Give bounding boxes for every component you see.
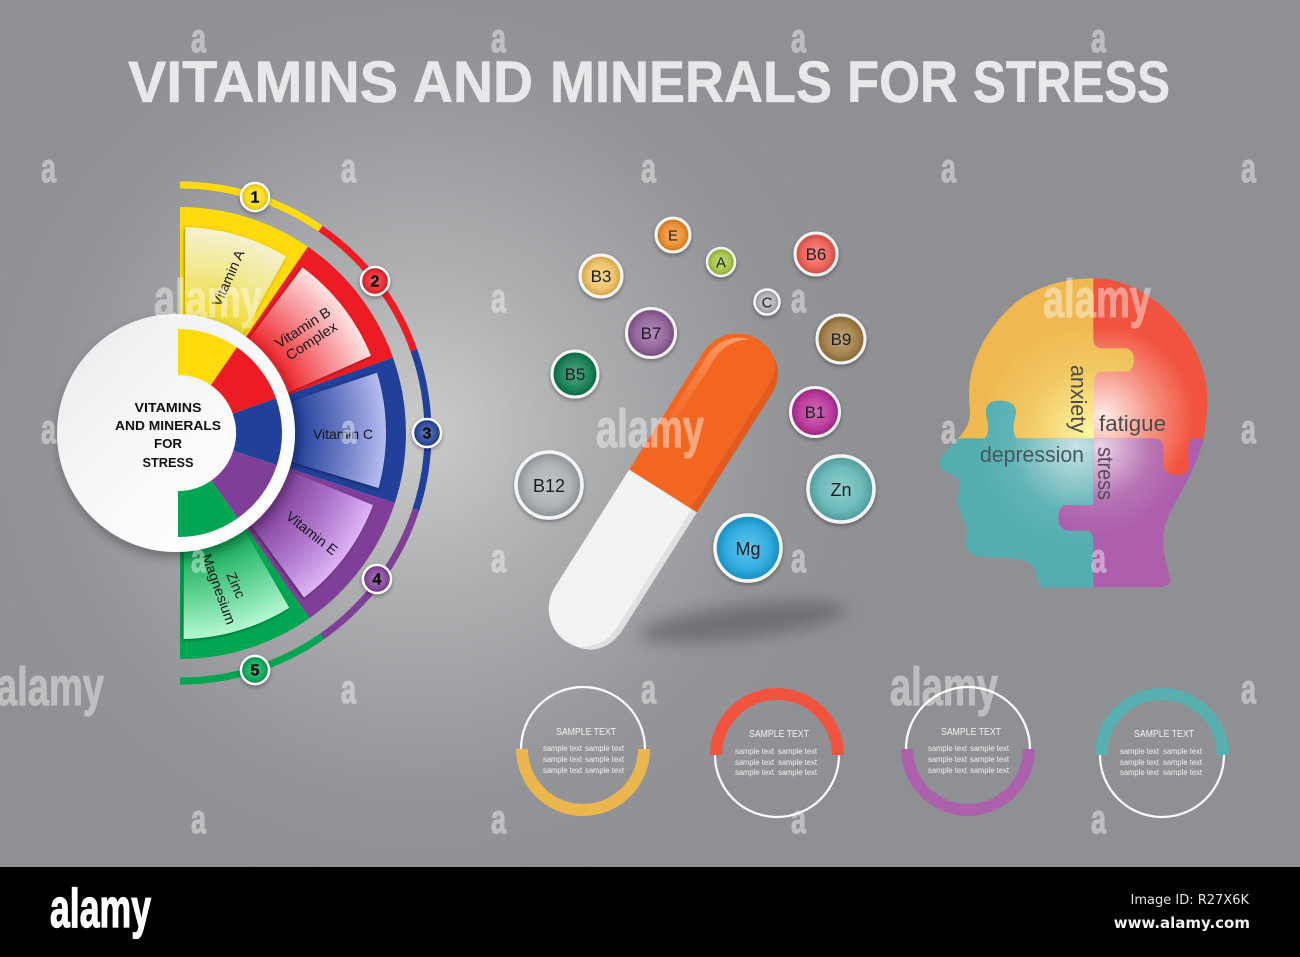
hub segments [178,329,282,537]
panel: zinc magnesium [184,425,289,639]
sample circle: purple: sample text [928,744,968,753]
stock watermark overlay: a [791,15,807,61]
sample circle: yellow: sample text [543,744,583,753]
stock watermark overlay: a [641,145,657,191]
stock watermark overlay: a [41,145,57,191]
sample circle: teal: sample text [1163,768,1203,777]
panel: vitamin E [178,425,373,598]
stock watermark overlay: a [491,796,507,842]
vitamin bubble B6: B6 [806,245,826,264]
center text: AND MINERALS [115,418,221,433]
sample circle: yellow: sample text [585,766,625,775]
sample circle: red: sample text [778,768,818,777]
sample circle: purple [901,687,1035,816]
word: anxiety: anxiety [1066,365,1091,433]
word: depression: depression [980,442,1084,467]
sample circle: teal: sample text [1120,758,1160,767]
stock watermark overlay: a [341,406,357,452]
panel: vitamin C [195,373,386,488]
sample circle: purple: sample text [970,755,1010,764]
center disc [57,314,295,552]
vitamin bubble E [656,218,690,252]
outer progress ring [180,185,428,681]
word: stress: stress [1093,447,1118,500]
stock watermark overlay: a [1091,796,1107,842]
sample circle: yellow: sample text [585,744,625,753]
stock watermark overlay: a [941,406,957,452]
pill shadow [637,592,847,652]
mineral bubble Mg: Mg [735,539,761,559]
stock watermark overlay: a [491,275,507,321]
vitamin bubble B7: B7 [641,324,661,343]
stock watermark overlay: a [1241,666,1257,712]
stock watermark overlay: a [41,406,57,452]
sample circle: red: sample text [735,747,775,756]
stock watermark overlay: a [791,535,807,581]
title: STRESS [973,50,1170,115]
stock watermark overlay: a [791,275,807,321]
sample circle: teal: sample text [1120,768,1160,777]
stock watermark overlay: alamy [596,399,704,459]
title: AND [413,50,533,115]
stock watermark overlay: a [191,796,207,842]
wedge: yellow [180,207,308,433]
footer image id: Image ID: R27X6K [1131,893,1249,908]
label: Zinc Magnesium: Magnesium [199,551,239,627]
center text: FOR [154,436,183,451]
stock watermark overlay: a [1091,15,1107,61]
vitamin bubble B3 [580,255,622,297]
vitamin bubble C: C [762,294,773,312]
mineral bubble B12 [516,452,582,518]
head pieces [939,278,1208,588]
title [128,50,1170,115]
footer band [0,867,1300,957]
number badge 4 [363,565,391,593]
center text: VITAMINS [134,400,202,415]
number badge 3: 3 [423,426,432,442]
vitamin bubble C [754,290,780,314]
wedge: red [180,247,393,433]
vitamin bubble B9 [817,315,865,363]
sample circle: purple: sample text [928,766,968,775]
number badge 4: 4 [373,572,382,588]
vitamin bubble B5: B5 [565,365,585,384]
center text: STRESS [142,455,194,470]
footer url: www.alamy.com [1114,914,1250,932]
vitamin bubble B6 [795,233,837,275]
center text [115,400,221,470]
stock watermark overlay: alamy [154,269,262,329]
number badge 1: 1 [251,190,260,206]
number badge 1 [241,183,269,211]
wedge: purple [180,433,395,618]
capsule white half [534,470,697,664]
sample circle: teal: SAMPLE TEXT [1134,728,1194,740]
number badge 3 [413,419,441,447]
sample circle: yellow [516,687,650,816]
head puzzle [939,278,1208,588]
label: Vitamin C: Vitamin C [313,426,373,442]
number badge 2: 2 [371,274,380,290]
number badge 5 [241,656,269,684]
sample circle: red: sample text [735,758,775,767]
sample circle: yellow: sample text [543,766,583,775]
title: FOR [847,50,958,115]
footer logo: alamy [50,877,151,939]
mineral bubble B12: B12 [533,476,565,496]
sample circle: purple: sample text [970,766,1010,775]
sample circle: red: SAMPLE TEXT [749,728,809,740]
sample circle: teal [1095,688,1229,817]
vitamin bubble E: E [668,228,678,244]
vitamin bubble B1 [790,388,840,436]
sample circle: red: sample text [735,768,775,777]
mineral bubble Zn: Zn [830,480,852,500]
vitamin bubble B7 [626,308,676,358]
mineral bubble Zn [808,456,874,522]
stock watermark overlay: alamy [890,657,998,717]
panel: vitamin A [184,227,286,441]
title: VITAMINS [128,50,398,115]
sample circle: teal: sample text [1163,747,1203,756]
sample circle: teal: sample text [1163,758,1203,767]
number badge 5: 5 [251,662,260,680]
vitamin bubble B1: B1 [805,403,825,422]
stock watermark overlay: a [491,535,507,581]
panel: vitamin B [170,267,371,445]
capsule [534,318,792,664]
mineral bubble Mg [715,515,781,581]
label: Zinc Magnesium: Zinc [223,569,249,601]
stock watermark overlay: a [191,15,207,61]
label: Vitamin E: Vitamin E [283,508,341,558]
stock watermark overlay: a [1241,406,1257,452]
sample circle: red [710,688,844,817]
sample circle: purple: SAMPLE TEXT [941,726,1001,738]
stock watermark overlay: a [191,535,207,581]
sample circle: yellow: sample text [543,755,583,764]
stock watermark overlay: a [1241,145,1257,191]
vitamin bubble B9: B9 [831,330,851,349]
stock watermark overlay: alamy [1043,269,1151,329]
sample circle: yellow: SAMPLE TEXT [556,726,616,738]
wedge: green [180,433,310,659]
label: Vitamin B Complex: Vitamin B [272,303,333,351]
stock watermark overlay: a [341,145,357,191]
vitamin bubble B3: B3 [591,267,611,286]
sample circle: red: sample text [778,747,818,756]
capsule orange half [629,318,792,512]
wedge: blue [180,358,406,503]
stock watermark overlay: a [341,666,357,712]
label: Vitamin A: Vitamin A [208,247,248,309]
number badge 2 [361,267,389,295]
title: MINERALS [550,50,832,115]
vitamin bubble A: A [716,254,726,272]
stock watermark overlay: a [791,796,807,842]
stock watermark overlay: a [941,145,957,191]
sample circle: purple: sample text [970,744,1010,753]
sample circle: yellow: sample text [585,755,625,764]
sample circle: purple: sample text [928,755,968,764]
panel: vitamins wheel [57,183,441,684]
sample circle: red: sample text [778,758,818,767]
stock watermark overlay: alamy [0,657,104,717]
word: fatigue: fatigue [1099,411,1166,436]
stock watermark overlay: a [1091,535,1107,581]
label: Vitamin B Complex [272,303,342,365]
stock watermark overlay: a [641,666,657,712]
stock watermark overlay: a [491,15,507,61]
label: Vitamin B Complex: Complex [283,318,340,363]
sample circle: teal: sample text [1120,747,1160,756]
vitamin bubble A [707,248,735,276]
vitamin bubble B5 [552,351,598,397]
